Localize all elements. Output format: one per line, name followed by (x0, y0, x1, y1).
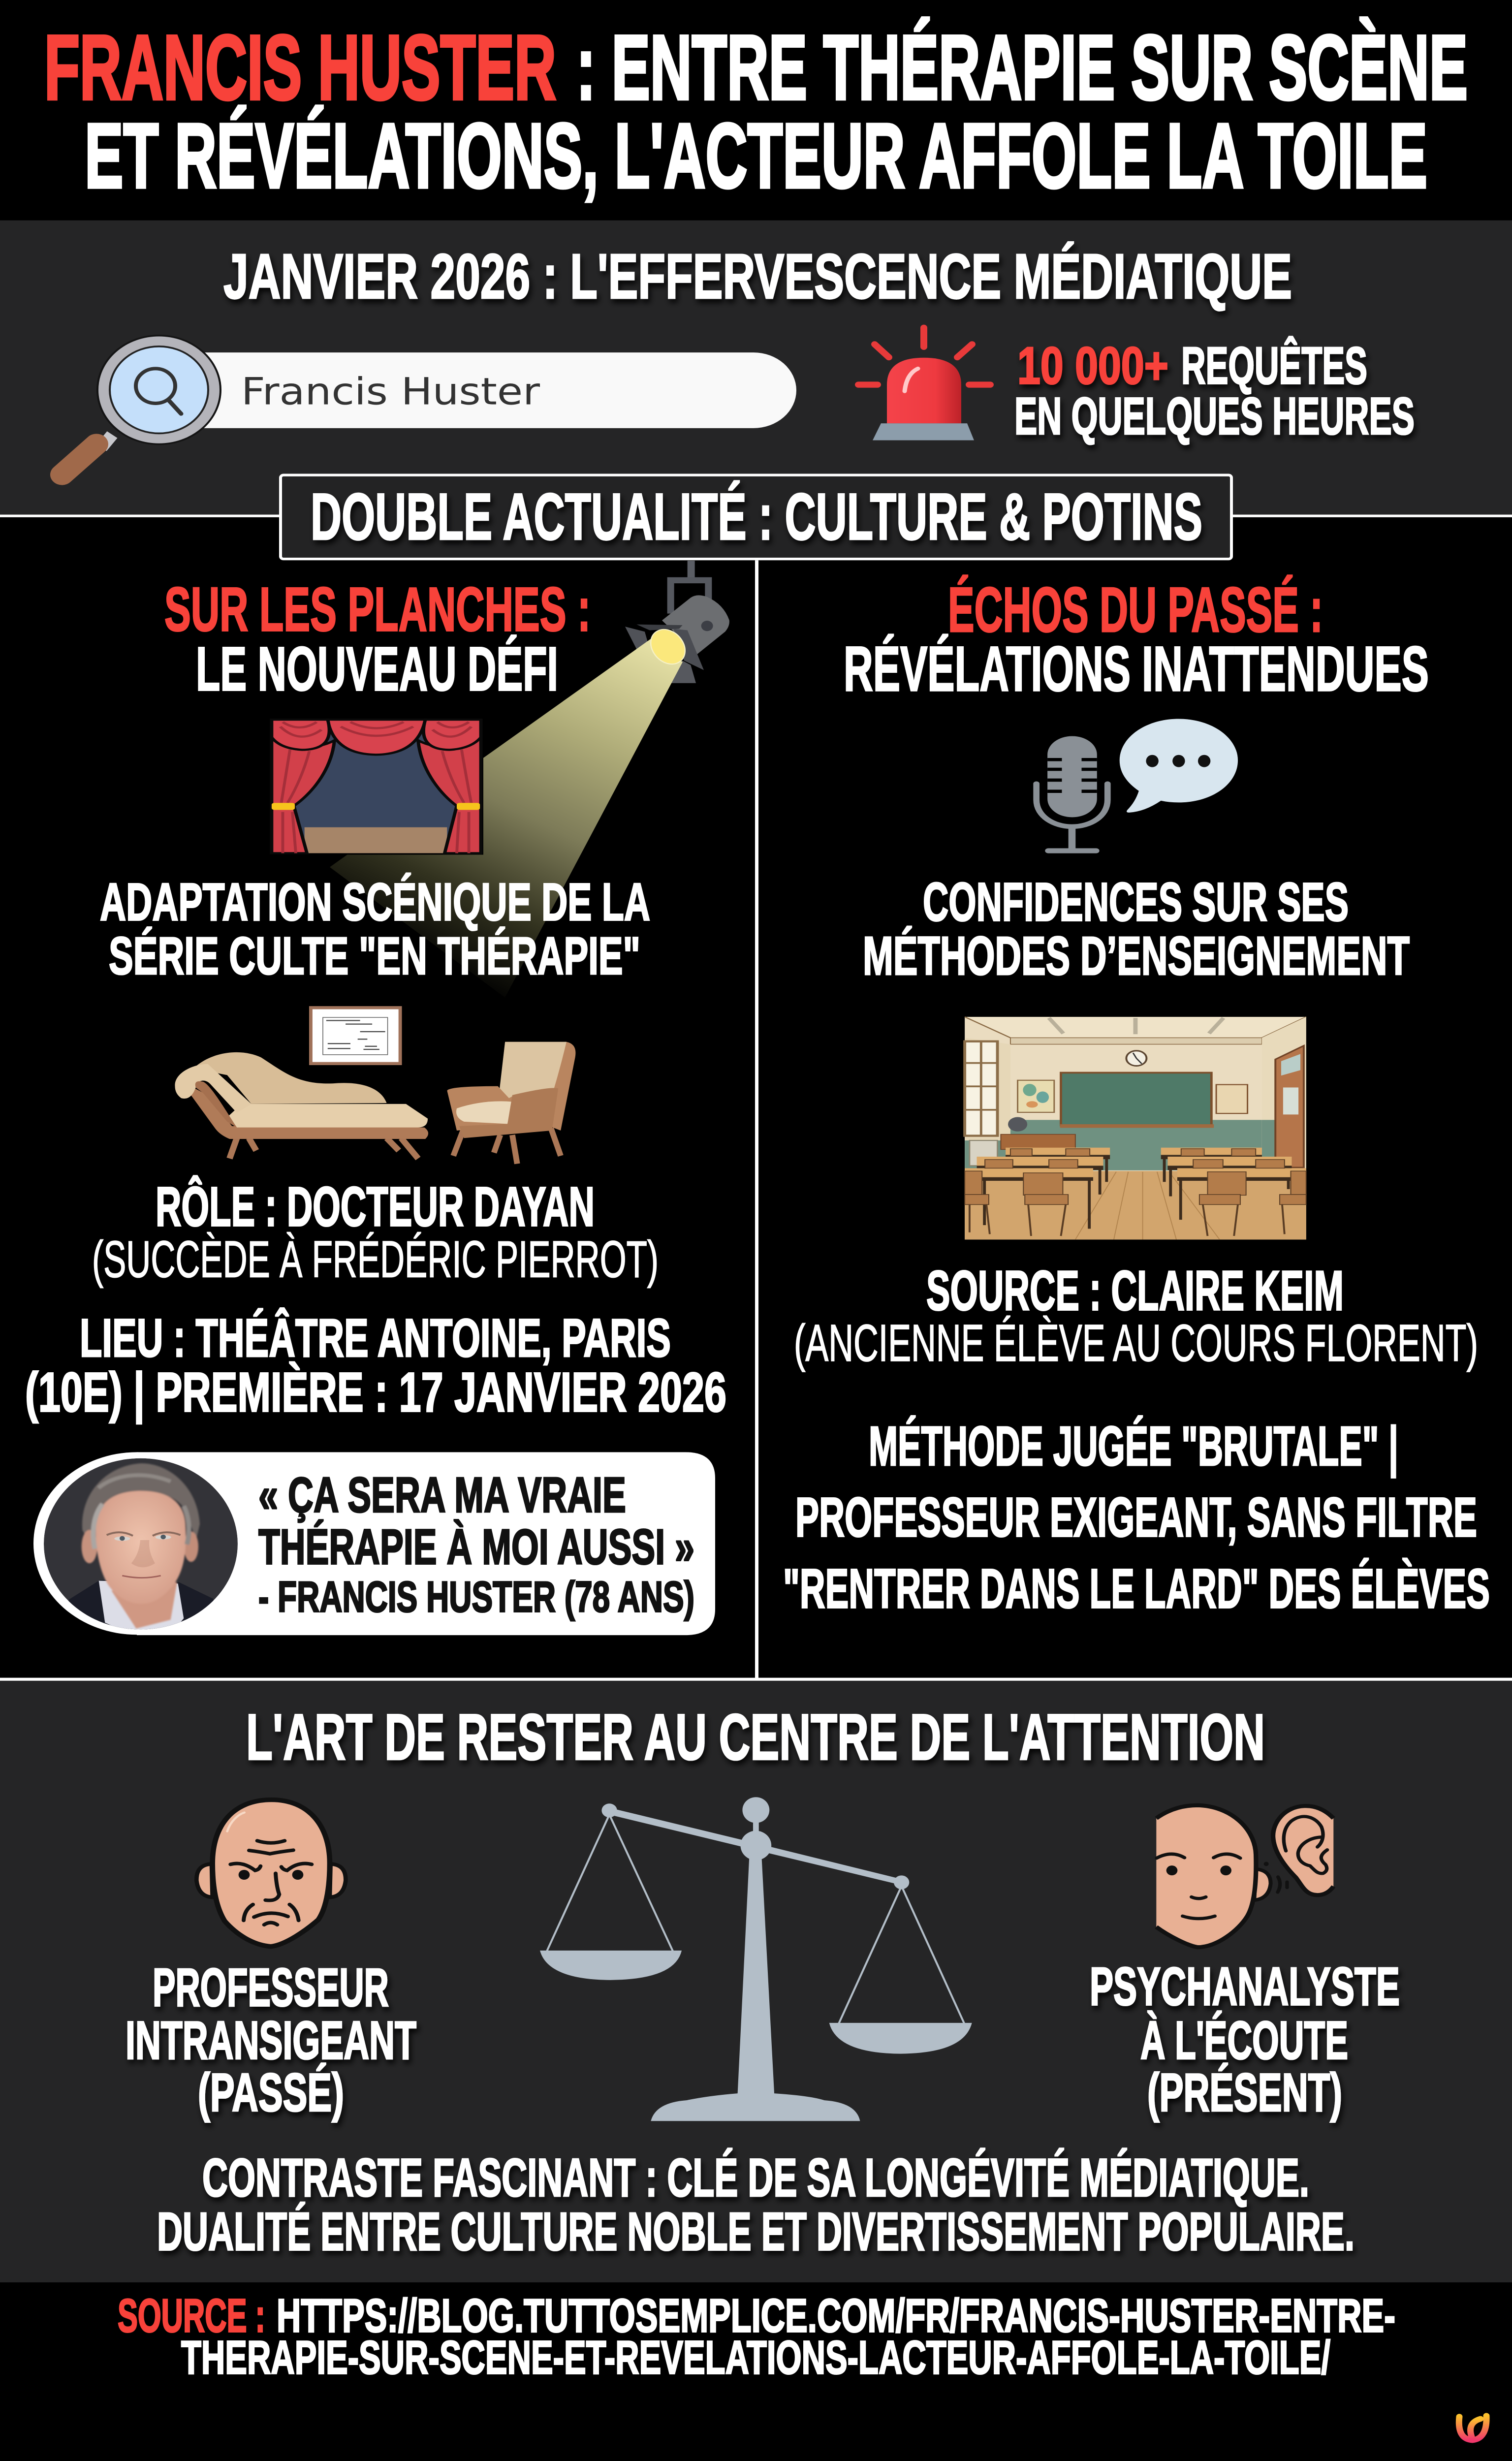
icon: microphone (1037, 736, 1107, 853)
text: source claire keim (794, 1260, 1478, 1372)
text: confidences (863, 871, 1410, 986)
search bar (148, 352, 796, 428)
icon: speech bubble (1120, 719, 1238, 813)
source footer: SOURCE : (118, 2290, 265, 2342)
icon: spotlight body (625, 561, 729, 683)
text: lieu et première: LIEU : THÉÂTRE ANTOINE, PARIS (80, 1308, 671, 1368)
title (44, 17, 1468, 207)
text: adaptation: SÉRIE CULTE "EN THÉRAPIE" (109, 927, 640, 985)
text: professeur: INTRANSIGEANT (126, 2010, 416, 2071)
text: psychanalyste: (PRÉSENT) (1147, 2062, 1342, 2123)
source footer (118, 2290, 1395, 2384)
icon: balance scale (540, 1797, 972, 2121)
heading: sur les planches: LE NOUVEAU DÉFI (196, 634, 558, 703)
text: psychanalyste: À L'ÉCOUTE (1140, 2010, 1348, 2071)
illustration: therapy couch (175, 1052, 428, 1159)
text: professeur: PROFESSEUR (153, 1957, 389, 2018)
text: professeur: (PASSÉ) (198, 2062, 344, 2123)
text: lieu et première (25, 1308, 726, 1424)
icon: magnifying glass (62, 336, 220, 474)
callout: quote (33, 1452, 715, 1635)
text: adaptation (100, 873, 650, 985)
text: rôle (92, 1175, 659, 1288)
illustration: armchair (447, 1042, 575, 1164)
text: méthode brutale (783, 1415, 1490, 1620)
icon: listening face (1156, 1805, 1333, 1947)
dividers (0, 515, 1512, 1681)
illustration: framed diploma (311, 1008, 400, 1064)
spotlight lens (644, 624, 692, 669)
text: professeur (126, 1957, 416, 2123)
icon: siren (858, 328, 990, 441)
stat: requests (1014, 336, 1415, 446)
stat: requests: 10 000+ (1017, 337, 1168, 395)
text: psychanalyste (1090, 1956, 1400, 2123)
text: lieu et première: (10E) | PREMIÈRE : 17 JANVIER 2026 (25, 1361, 726, 1424)
ear (1273, 1806, 1333, 1895)
logo (1459, 2416, 1486, 2440)
text: rôle: RÔLE : DOCTEUR DAYAN (156, 1175, 595, 1238)
text: adaptation: ADAPTATION SCÉNIQUE DE LA (100, 873, 650, 932)
heading: sur les planches: SUR LES PLANCHES : (164, 574, 591, 644)
search bar: Francis Huster (241, 370, 540, 413)
text: rôle: (SUCCÈDE À FRÉDÉRIC PIERROT) (92, 1230, 659, 1288)
icon: stern professor face (196, 1800, 346, 1947)
heading: échos du passé (844, 574, 1429, 704)
quote text: « ÇA SERA MA VRAIE (258, 1467, 626, 1523)
portrait (44, 1458, 238, 1634)
title: FRANCIS HUSTER (44, 17, 556, 119)
text: contraste (157, 2147, 1354, 2262)
illustration: stage curtains (271, 719, 482, 854)
banner: double actualité (281, 475, 1231, 559)
callout: quote: - FRANCIS HUSTER (78 ANS) (258, 1573, 694, 1621)
illustration: classroom (965, 1017, 1306, 1239)
panel: media buzz (0, 221, 1512, 516)
panel: art of attention (0, 1681, 1512, 2282)
spotlight beam (330, 639, 683, 998)
stat: requests: REQUÊTES (1181, 336, 1367, 395)
callout: quote: THÉRAPIE À MOI AUSSI » (258, 1519, 694, 1575)
heading: sur les planches (164, 574, 591, 703)
